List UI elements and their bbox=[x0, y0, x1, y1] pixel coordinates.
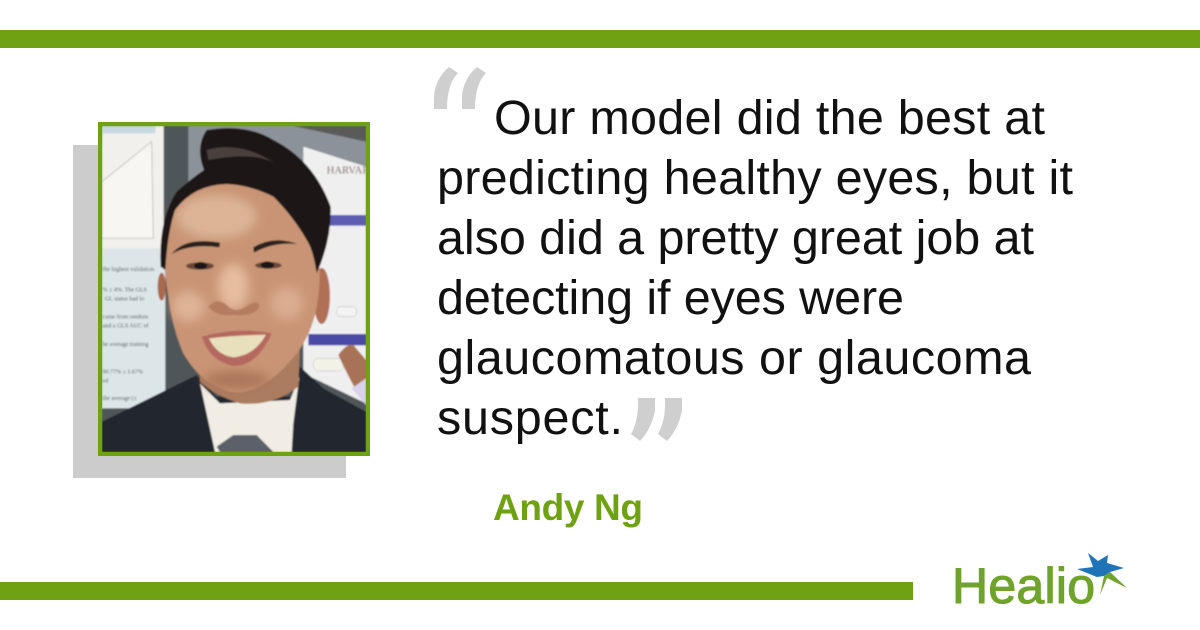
photo background: small poster text bbox=[103, 165, 377, 402]
quote text: also did a pretty great job at bbox=[437, 211, 1035, 265]
hair bbox=[160, 128, 331, 273]
eyes bbox=[186, 261, 282, 270]
photo background: small poster text: 90.77% ± 1.67% bbox=[103, 369, 143, 375]
suit bbox=[102, 367, 366, 452]
photo background: posters bbox=[102, 126, 366, 452]
quote text: predicting healthy eyes, but it bbox=[437, 151, 1074, 205]
quote text bbox=[437, 91, 1074, 445]
quote text: detecting if eyes were bbox=[437, 271, 904, 325]
photo background: small poster text: he average training bbox=[103, 342, 149, 348]
shirt and tie bbox=[200, 377, 299, 452]
photo background: small poster text: % ± 4%. The GLS bbox=[103, 288, 147, 294]
top green bar bbox=[0, 30, 1200, 48]
eyebrows bbox=[172, 240, 297, 254]
photo background: small poster text: ed bbox=[103, 379, 108, 385]
closing quotation mark bbox=[631, 398, 682, 441]
hair highlight bbox=[206, 146, 272, 162]
portrait photo bbox=[102, 126, 377, 452]
face bbox=[163, 182, 320, 393]
quote text: glaucomatous or glaucoma bbox=[437, 331, 1031, 385]
photo background: small poster text: HARVARD bbox=[327, 165, 377, 176]
opening quotation mark bbox=[434, 67, 486, 109]
photo background: small poster text: GL status had lo bbox=[105, 297, 144, 303]
ears bbox=[313, 268, 330, 324]
gray offset panel behind photo bbox=[73, 145, 346, 478]
logo wordmark: Healio bbox=[952, 558, 1095, 614]
photo background: small poster text: and a GLS AUC of bbox=[103, 323, 149, 330]
neck bbox=[200, 343, 300, 404]
bottom green bar bbox=[0, 582, 913, 600]
nose bbox=[208, 301, 259, 315]
attribution name: Andy Ng bbox=[493, 487, 643, 528]
logo star bbox=[1077, 553, 1124, 577]
mouth bbox=[202, 331, 272, 366]
photo background: small poster text: came from random bbox=[103, 313, 149, 320]
photo background: small poster text: the average (± bbox=[103, 395, 138, 402]
quote text: Our model did the best at bbox=[494, 91, 1046, 145]
Healio logo bbox=[952, 553, 1127, 614]
photo frame bbox=[98, 122, 370, 456]
face highlights bbox=[172, 195, 303, 389]
quote text: suspect. bbox=[437, 391, 623, 445]
photo background: small poster text: the highest validation bbox=[103, 267, 154, 273]
